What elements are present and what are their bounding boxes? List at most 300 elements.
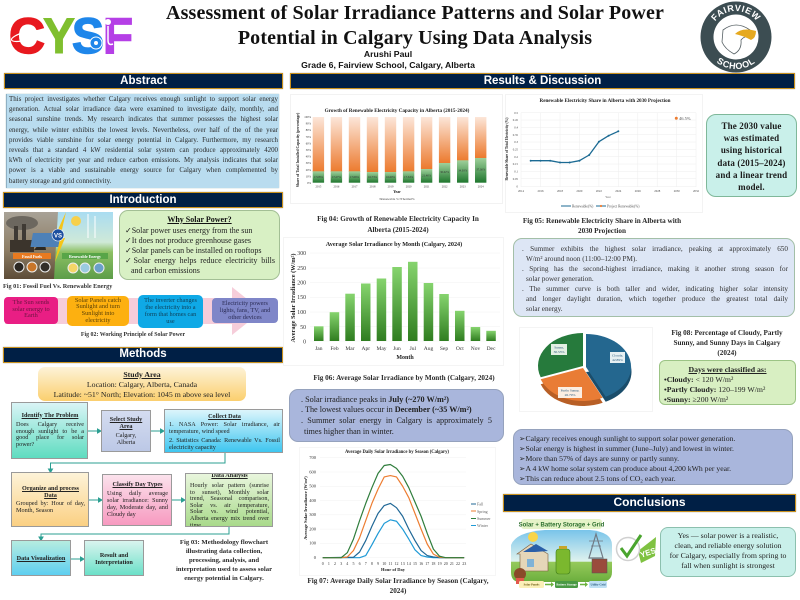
chart: average daily solar irradiance by season: 300	[309, 512, 317, 517]
list: solar benefits: and carbon emissions	[131, 266, 200, 274]
chart: renewable electricity share with 2030 projection: 2022	[596, 189, 602, 193]
chart: average daily solar irradiance by season: 19	[438, 561, 442, 566]
flow box: collect data: temperature, wind speed	[169, 428, 230, 435]
heading: Methods	[3, 347, 283, 363]
chart: renewable electricity share with 2030 projection: Renewable(%)	[572, 204, 594, 208]
image: fossil fuel vs renewable energy: Renewable Energy	[69, 254, 101, 259]
icon: yes check mark	[616, 534, 660, 563]
author line	[301, 49, 475, 70]
chart: growth of renewable electricity capacity: Share of Total Installed Capacity (percentage)	[296, 112, 300, 187]
panel: summer irradiance notes: . The summer curve is both taller and wider, indicating higher solar intensity	[522, 285, 788, 293]
chart: average daily solar irradiance by season: 1	[328, 561, 330, 566]
chart: average daily solar irradiance by season: 11	[388, 561, 392, 566]
callout: 2030 value method: data (2015–2024)	[717, 158, 786, 168]
logo: CYSF: S	[72, 8, 104, 64]
flow box: collect data: 2. Statistics Canada: Renewable Vs. Fossil	[169, 437, 280, 444]
chart: growth of renewable electricity capacity: 17.27%	[332, 175, 341, 179]
chart: average solar irradiance by month: Nov	[471, 346, 480, 352]
panel: key findings: ➢Calgary receives enough sunlight to support solar power generation.	[519, 434, 735, 442]
panel: key findings: ➢This can reduce about 2.5 tons of CO₂ each year.	[519, 474, 676, 482]
caption: Fig 05: Fig 05: Renewable Electricity Share in Alberta with	[523, 217, 681, 225]
chart: average daily solar irradiance by season: 12	[394, 561, 398, 566]
chart: renewable electricity share with 2030 projection: Year	[605, 195, 611, 199]
caption: Fig 04: Fig 04: Growth of Renewable Electricity Capacity In	[317, 215, 479, 223]
panel: study area: Study Area	[123, 370, 161, 379]
chart: growth of renewable electricity capacity: 17.54%	[404, 175, 414, 179]
flow box: identify the problem: power?	[16, 441, 34, 448]
chart: average solar irradiance by month: Aug	[424, 346, 433, 352]
chart: growth of renewable electricity capacity: 2018	[370, 184, 376, 188]
chart: average daily solar irradiance by season: 14	[407, 561, 411, 566]
chart: cloudy, partly sunny and sunny days pie: Partly Sunny,	[561, 388, 580, 394]
flow box: identify the problem: enough sunlight to be a	[16, 428, 84, 435]
flow step: inverter: The inverter changes	[144, 297, 197, 304]
logo: Fairview School: FAIRVIEW	[710, 4, 761, 21]
image: solar, battery storage and grid	[511, 519, 612, 588]
chart: average solar irradiance by month: Mar	[345, 346, 355, 352]
chart: average daily solar irradiance by season: Hour of Day	[381, 567, 406, 572]
chart: average solar irradiance by month: Apr	[362, 346, 370, 352]
chart: growth of renewable electricity capacity: 16.73%	[368, 175, 378, 179]
chart: renewable electricity share with 2030 projection: 0.45	[513, 118, 518, 122]
flow box: classify day types: day, Moderate day, and	[107, 504, 168, 511]
heading: Introduction: Introduction	[109, 194, 177, 206]
flow box: select study area: Calgary,	[116, 432, 136, 439]
flow box: data analysis	[185, 473, 273, 527]
chart: renewable electricity share with 2030 projection: 0	[516, 184, 518, 188]
panel: abstract text: kWh of electricity per year and reduce carbon emissions. My analysis indicates that solar	[9, 157, 278, 164]
chart: average daily solar irradiance by season: 22	[456, 561, 460, 566]
panel: monthly findings: . Summer solar energy in Calgary is approximately 5	[301, 416, 492, 425]
flow box: data visualization: Data Visualization	[17, 555, 65, 562]
heading: Conclusions	[503, 494, 796, 512]
flow box: data analysis: to sunset), Monthly solar	[190, 489, 269, 496]
chart: average daily solar irradiance by season: Winter	[477, 523, 489, 528]
panel: monthly findings: . Solar irradiance peaks in July (~270 W/m²)	[301, 394, 449, 404]
chart: renewable electricity share with 2030 projection: 2032	[693, 189, 700, 193]
chart: growth of renewable electricity capacity: 0%	[307, 181, 312, 185]
flow box: result and interpretation	[84, 540, 144, 576]
chart: growth of renewable electricity capacity: 10%	[306, 174, 312, 178]
flow step: solar panels: Sunlight and turn	[76, 303, 120, 310]
chart: growth of renewable electricity capacity: 2021	[424, 184, 430, 188]
chart: average solar irradiance by month	[283, 237, 504, 366]
chart: growth of renewable electricity capacity: 34.03%	[458, 168, 468, 172]
list: solar benefits: ✓It does not produce greenhouse gases	[125, 236, 251, 244]
chart: average daily solar irradiance by season: 6	[359, 561, 361, 566]
chart: average daily solar irradiance by season: Spring	[477, 509, 488, 514]
chart: growth of renewable electricity capacity: 50%	[306, 148, 312, 152]
flow box: organize and process data: Month, Season	[16, 507, 53, 514]
chart: average daily solar irradiance by season: Fall	[477, 502, 484, 506]
panel: conclusion answer	[660, 527, 796, 577]
image: fossil fuel vs renewable energy: Fossil Fuels	[22, 254, 42, 259]
caption: Fig 03: interpretation used to assess solar	[176, 566, 272, 573]
chart: growth of renewable electricity capacity: 20%	[306, 168, 312, 172]
chart: renewable electricity share with 2030 projection: 0.25	[513, 148, 518, 152]
chart: growth of renewable electricity capacity: 70%	[306, 135, 312, 139]
chart: renewable electricity share with 2030 projection: 0.05	[513, 177, 518, 181]
flow box: result and interpretation: Interpretation	[95, 559, 133, 566]
chart: cloudy, partly sunny and sunny days pie: 42.89%	[612, 358, 623, 362]
chart: growth of renewable electricity capacity: 60%	[306, 141, 312, 145]
chart: growth of renewable electricity capacity: 2019	[388, 184, 394, 188]
flow step: electricity: Electricity powers	[222, 300, 268, 307]
chart: renewable electricity share with 2030 projection: 2024	[615, 189, 622, 193]
chart: average daily solar irradiance by season: Summer	[477, 516, 491, 521]
chart: average daily solar irradiance by season: 16	[419, 561, 423, 566]
chart: average daily solar irradiance by season: 9	[377, 561, 379, 566]
flow step: electricity: lights, fans, TV, and	[220, 307, 270, 314]
flow step: sun: solar energy to	[12, 306, 50, 313]
chart: average daily solar irradiance by season: 200	[309, 526, 317, 532]
panel: conclusion answer: fall when sunlight is strongest	[681, 561, 775, 570]
icon: yes check mark: YES!	[639, 545, 660, 560]
chart: renewable electricity share with 2030 projection: 46.5%	[679, 116, 691, 121]
panel: conclusion answer: for Calgary, especially from spring to	[670, 551, 786, 560]
panel: abstract text	[6, 94, 279, 188]
flow box: data analysis: Hourly solar pattern (sunrise	[190, 482, 269, 489]
chart: growth of renewable electricity capacity: 2022	[442, 184, 448, 188]
chart: average solar irradiance by month: Average Solar Irradiance by Month (Calgary, 2024)	[326, 241, 462, 248]
chart: average daily solar irradiance by season	[299, 447, 496, 576]
chart: average daily solar irradiance by season: 10	[382, 561, 386, 566]
flow box: organize and process data: Grouped by: Hour of day,	[16, 500, 85, 507]
list: solar benefits	[125, 226, 275, 274]
chart: renewable electricity share with 2030 projection: Renewable Share of Total Electricity (%)	[505, 117, 509, 180]
flow box: classify day types: Cloudy day	[107, 511, 136, 518]
chart: growth of renewable electricity capacity: 2024	[478, 184, 484, 188]
panel: abstract text: battery storage and grid connectivity.	[9, 178, 111, 185]
panel: summer irradiance notes: W/m² around noon (11:00–12:00 PM).	[526, 255, 637, 263]
panel: key findings: ➢More than 57% of days are sunny or partly sunny.	[519, 454, 679, 462]
chart: average daily solar irradiance by season: 0	[322, 561, 324, 566]
chart: average daily solar irradiance by season: 400	[309, 498, 317, 503]
image: fossil fuel vs renewable energy	[4, 212, 113, 279]
panel: day classification: •Cloudy: < 120 W/m²	[664, 374, 733, 384]
caption: Fig 08: Fig 08: Percentage of Cloudy, Partly	[671, 329, 783, 337]
callout: 2030 value method: using historical	[721, 145, 782, 155]
heading: Introduction	[3, 192, 283, 208]
chart: renewable electricity share with 2030 projection: 2014	[518, 189, 524, 193]
chart: average solar irradiance by month: Average Solar Irradiance (W/m²)	[290, 254, 297, 342]
chart: growth of renewable electricity capacity: 80%	[306, 128, 312, 132]
chart: growth of renewable electricity capacity: 2015	[316, 184, 322, 188]
chart: average daily solar irradiance by season: 2	[334, 561, 336, 566]
caption: Fig 05	[523, 217, 681, 235]
panel: abstract text: This project investigates whether Calgary receives enough sunlight to support solar energy	[9, 96, 278, 103]
chart: average solar irradiance by month: 50	[300, 325, 306, 331]
flow step: solar panels: electricity	[85, 317, 111, 324]
chart: growth of renewable electricity capacity: 17.08%	[314, 175, 323, 179]
flow step: inverter: use	[166, 318, 175, 325]
panel: monthly findings: . The lowest values occur in December (~35 W/m²)	[301, 405, 472, 414]
flow box: result and interpretation: Result and	[100, 552, 128, 559]
flow box: select study area	[101, 410, 151, 452]
chart: growth of renewable electricity capacity: 21.46%	[422, 174, 432, 178]
heading: Abstract: Abstract	[120, 75, 167, 87]
image: solar, battery storage and grid: Solar + Battery Storage + Grid	[519, 522, 605, 528]
flow box: select study area: Area	[120, 423, 132, 430]
chart: cloudy, partly sunny and sunny days pie: Cloudy,	[612, 354, 623, 358]
caption: Fig 08: Sunny, and Sunny Days in Calgary	[673, 339, 781, 347]
chart: growth of renewable electricity capacity: 90%	[306, 122, 312, 126]
list: solar benefits: ✓Solar power uses energy from the sun	[125, 226, 252, 234]
arrow: solar power flow	[5, 287, 247, 335]
caption: Fig 04	[317, 215, 479, 234]
flow box: collect data	[164, 409, 283, 453]
chart: growth of renewable electricity capacity: ▪Renewable % ▪Thermal%	[379, 197, 415, 201]
heading: Conclusions: Conclusions	[613, 495, 686, 509]
caption: Fig 03: processing, analysis, and	[189, 557, 259, 564]
flow box: data analysis: Solar vs. air temperature,	[190, 502, 269, 509]
panel: key findings: ➢Solar energy is highest in summer (June–July) and lowest in winter.	[519, 444, 734, 452]
chart: growth of renewable electricity capacity: 37.36%	[476, 168, 486, 172]
flow step: electricity	[212, 298, 278, 323]
chart: renewable electricity share with 2030 projection	[505, 94, 703, 213]
flow box: collect data: Collect Data	[208, 412, 241, 420]
flow box: classify day types: Using daily average	[107, 490, 168, 497]
chart: average daily solar irradiance by season: 5	[352, 561, 354, 566]
flow step: solar panels: Solar Panels catch	[75, 296, 121, 304]
chart: average daily solar irradiance by season: 23	[462, 561, 466, 566]
title: Potential in Calgary Using Data Analysis	[238, 26, 592, 48]
flow box: organize and process data: Organize and process	[22, 485, 79, 492]
heading: Results & Discussion	[290, 73, 795, 89]
panel: monthly findings: times higher than in winter.	[304, 427, 394, 436]
panel: summer irradiance notes: solar energy.	[526, 305, 563, 313]
image: fossil fuel vs renewable energy: VS	[54, 234, 62, 240]
chart: average daily solar irradiance by season: 13	[401, 561, 405, 566]
heading: Results & Discussion: Results & Discussion	[484, 75, 601, 87]
flow box: identify the problem: Does Calgary receive	[16, 421, 84, 428]
chart: average daily solar irradiance by season: 8	[371, 561, 373, 566]
panel: conclusion answer: clean, and reliable energy solution	[674, 541, 782, 550]
author line: Arushi Paul	[364, 49, 412, 59]
panel: summer irradiance notes: . Summer exhibits the highest solar irradiance, peaking at approximately 650	[522, 245, 788, 253]
flow box: data analysis: Solar vs. wind potential,	[190, 508, 269, 515]
flow step: sun	[4, 297, 58, 324]
panel: abstract text: provides viable sunshine for solar energy potential in Calgary. Furthermore, my research	[9, 137, 278, 144]
chart: renewable electricity share with 2030 projection: 0.3	[514, 140, 518, 144]
caption: Fig 03	[176, 539, 272, 582]
flow step: sun: Earth	[24, 312, 38, 319]
flow step: electricity: other devices	[228, 314, 262, 321]
flow step: solar panels: Sunlight into	[82, 310, 114, 317]
flow box: select study area: Alberta	[117, 439, 135, 446]
chart: average solar irradiance by month: Jan	[315, 346, 323, 352]
panel: abstract text: energy, while winter exhibits the lowest levels. Nevertheless, over half of the of the year	[9, 127, 278, 134]
panel: conclusion answer: Yes — solar power is a realistic,	[678, 530, 778, 540]
chart: average daily solar irradiance by season: 0	[314, 555, 317, 560]
chart: renewable electricity share with 2030 projection: 2030	[674, 189, 680, 193]
chart: growth of renewable electricity capacity: 2023	[460, 184, 466, 188]
chart: growth of renewable electricity capacity	[290, 94, 503, 204]
flow box: classify day types	[102, 474, 172, 526]
flow step: inverter: the electricity into a	[145, 304, 196, 311]
chart: growth of renewable electricity capacity: 2017	[352, 184, 358, 188]
caption: Fig 07: 2024)	[390, 587, 406, 595]
panel: key findings	[513, 429, 793, 485]
callout: 2030 value method	[706, 114, 797, 197]
panel: day classification	[659, 360, 796, 405]
panel: day classification: Days were classified as:	[688, 364, 767, 374]
author line: Grade 6, Fairview School, Calgary, Alberta	[301, 60, 475, 70]
chart: average daily solar irradiance by season: Average Daily Solar Irradiance by Season (Calgary)	[345, 450, 449, 455]
caption: Fig 02: Fig 02: Working Principle of Solar Power	[81, 332, 185, 338]
title: Assessment of Solar Irradiance Patterns and Solar Power	[166, 2, 664, 24]
heading: Methods: Methods	[119, 348, 167, 360]
chart: average solar irradiance by month: May	[376, 346, 387, 352]
chart: average solar irradiance by month: 250	[297, 266, 306, 272]
chart: cloudy, partly sunny and sunny days pie: Sunny,	[554, 346, 564, 350]
callout: 2030 value method: and a linear trend	[716, 170, 787, 180]
chart: average daily solar irradiance by season: 100	[309, 540, 317, 546]
caption: Fig 04: Alberta (2015-2024)	[367, 226, 429, 234]
flow box: identify the problem	[11, 402, 88, 459]
chart: average solar irradiance by month: 300	[297, 251, 306, 257]
chart: average daily solar irradiance by season: 4	[346, 561, 348, 566]
chart: growth of renewable electricity capacity: 2020	[406, 184, 412, 188]
chart: renewable electricity share with 2030 projection: 0.5	[514, 111, 518, 115]
chart: growth of renewable electricity capacity: Year	[393, 190, 401, 194]
caption: Fig 07	[307, 577, 489, 595]
chart: growth of renewable electricity capacity: Growth of Renewable Electricity Capacity in Alberta (2015-2024)	[325, 107, 470, 114]
chart: average daily solar irradiance by season: 500	[309, 484, 317, 488]
chart: average daily solar irradiance by season: 700	[309, 455, 317, 460]
flow box: organize and process data: Data	[44, 492, 57, 499]
panel: abstract text: power is a viable and sustainable energy source for Calgary when complemented by	[9, 167, 278, 174]
chart: renewable electricity share with 2030 projection: Renewable Electricity Share in Alberta with 2030 Projection	[540, 98, 671, 104]
heading: why solar power: Why Solar Power?	[167, 215, 232, 224]
flow box: classify day types: Classify Day Types	[113, 481, 162, 488]
heading: Abstract	[4, 73, 283, 89]
caption: Fig 08	[671, 329, 783, 357]
chart: average solar irradiance by month: 200	[297, 280, 306, 286]
chart: average solar irradiance by month: Jul	[410, 346, 416, 352]
flow box: data analysis: Alberta energy mix trend over	[190, 515, 269, 522]
chart: renewable electricity share with 2030 projection: 2026	[635, 189, 641, 193]
callout: 2030 value method: The 2030 value	[721, 121, 782, 131]
panel: why solar power	[119, 210, 280, 280]
flow box: collect data: electricity capacity	[169, 444, 216, 451]
list: solar benefits: ✓Solar panels can be installed on rooftops	[125, 246, 261, 254]
panel: study area: Location: Calgary, Alberta, Canada	[87, 380, 197, 389]
chart: average daily solar irradiance by season: 7	[365, 561, 367, 566]
panel: key findings: ➢A 4 kW home solar system can produce about 4,200 kWh per year.	[519, 464, 731, 472]
flow arrows	[38, 428, 230, 562]
panel: day classification: •Partly Cloudy: 120–199 W/m²	[664, 384, 765, 394]
flow step: solar panels	[67, 296, 129, 326]
callout: 2030 value method: model.	[738, 182, 765, 192]
logo: Fairview School	[700, 2, 772, 72]
chart: average solar irradiance by month: 0	[303, 340, 306, 346]
flow box: identify the problem: good place for solar	[16, 434, 84, 441]
panel: study area	[38, 367, 246, 401]
chart: average daily solar irradiance by season: 21	[450, 561, 454, 566]
chart: renewable electricity share with 2030 projection: Project Renewable(%)	[607, 204, 640, 208]
logo: CYSF	[9, 8, 133, 64]
chart: average daily solar irradiance by season: 600	[309, 470, 317, 474]
flow box: organize and process data	[11, 472, 89, 527]
caption: Fig 06: Fig 06: Average Solar Irradiance by Month (Calgary, 2024)	[313, 374, 495, 382]
chart: average solar irradiance by month: Month	[396, 355, 414, 361]
chart: renewable electricity share with 2030 projection: 2018	[557, 189, 564, 193]
chart: renewable electricity share with 2030 projection: 0.15	[513, 162, 518, 166]
flow box: select study area: Select Study	[110, 416, 142, 423]
caption: Fig 01: Fig 01: Fossil Fuel Vs. Renewable Energy	[3, 283, 112, 290]
chart: growth of renewable electricity capacity: 17.06%	[350, 175, 360, 179]
chart: cloudy, partly sunny and sunny days pie: 26.79%	[565, 393, 575, 397]
chart: average solar irradiance by month: 100	[297, 310, 306, 316]
image: solar, battery storage and grid: Utility Grid	[590, 582, 606, 586]
chart: average daily solar irradiance by season: 17	[425, 561, 429, 566]
caption: Fig 05: 2030 Projection	[578, 227, 626, 235]
image: solar, battery storage and grid: Solar Panels	[524, 582, 540, 586]
title	[166, 2, 664, 48]
chart: renewable electricity share with 2030 projection: 0.4	[514, 126, 518, 130]
list: solar benefits: ✓Solar energy helps reduce electricity bills	[125, 256, 275, 264]
flow step: sun: The Sun sends	[13, 299, 49, 306]
panel: summer irradiance notes: and longer daylight duration, which together produce the greatest total daily	[526, 295, 788, 303]
chart: average solar irradiance by month: Sep	[440, 346, 448, 352]
caption: Fig 03: illustrating data collection,	[186, 548, 262, 555]
logo: CYSF: C	[9, 8, 45, 64]
chart: growth of renewable electricity capacity: 16.60%	[386, 175, 396, 179]
caption: Fig 03: Fig 03: Methodology flowchart	[180, 539, 268, 546]
chart: average solar irradiance by month: Dec	[487, 346, 496, 352]
caption: Fig 08: (2024)	[717, 349, 737, 357]
flow box: identify the problem: Identify The Problem	[22, 412, 78, 418]
chart: average solar irradiance by month: 150	[297, 295, 306, 301]
logo: CYSF: F	[103, 8, 133, 64]
chart: growth of renewable electricity capacity: 2016	[334, 184, 340, 188]
chart: average solar irradiance by month: Feb	[330, 346, 339, 352]
chart: cloudy, partly sunny and sunny days pie	[519, 327, 653, 412]
chart: renewable electricity share with 2030 projection: 2020	[576, 189, 583, 193]
chart: average solar irradiance by month: Jun	[393, 346, 401, 352]
flow box: classify day types: solar irradiance: Sunny	[107, 497, 168, 504]
chart: growth of renewable electricity capacity: 30.02%	[440, 170, 450, 174]
panel: day classification: •Sunny: ≥200 W/m²	[664, 394, 728, 404]
chart: growth of renewable electricity capacity: 100%	[304, 115, 312, 119]
logo: Fairview School: SCHOOL	[717, 58, 755, 70]
chart: growth of renewable electricity capacity: 40%	[306, 155, 312, 159]
panel: study area: Latitude: ~51° North; Elevation: 1045 m above sea level	[54, 390, 230, 399]
image: solar, battery storage and grid: Battery Storage	[556, 582, 577, 586]
chart: renewable electricity share with 2030 projection: 0.1	[514, 170, 518, 174]
chart: average daily solar irradiance by season: 20	[444, 561, 448, 566]
chart: cloudy, partly sunny and sunny days pie: 30.53%	[554, 350, 564, 354]
panel: summer irradiance notes: . Spring has the second-highest irradiance, making it another strong season for	[522, 265, 788, 273]
flow box: data visualization	[11, 540, 71, 576]
chart: renewable electricity share with 2030 projection: 0.2	[514, 155, 518, 159]
flow box: data analysis: trend, Seasonal comparison,	[190, 495, 269, 502]
callout: 2030 value method: was estimated	[724, 133, 779, 143]
chart: average daily solar irradiance by season: 15	[413, 561, 417, 566]
chart: renewable electricity share with 2030 projection: 0.35	[513, 133, 518, 137]
panel: monthly findings	[289, 389, 504, 442]
flow step: inverter	[138, 295, 203, 328]
panel: abstract text: reveals that a standard 4 kW residential solar system can produce approximately 4200	[9, 147, 278, 154]
logo: CYSF: Y	[43, 8, 75, 64]
chart: average daily solar irradiance by season: 3	[340, 561, 342, 566]
panel: abstract text: seasonal sunshine trends. My research indicates that summer possesses the highest solar	[9, 116, 278, 123]
flow step: inverter: form that homes can	[145, 311, 196, 318]
chart: average daily solar irradiance by season: Average Solar Irradiance (W/m²)	[303, 476, 308, 540]
chart: renewable electricity share with 2030 projection: 2028	[654, 189, 661, 193]
chart: average solar irradiance by month: Oct	[456, 346, 464, 352]
